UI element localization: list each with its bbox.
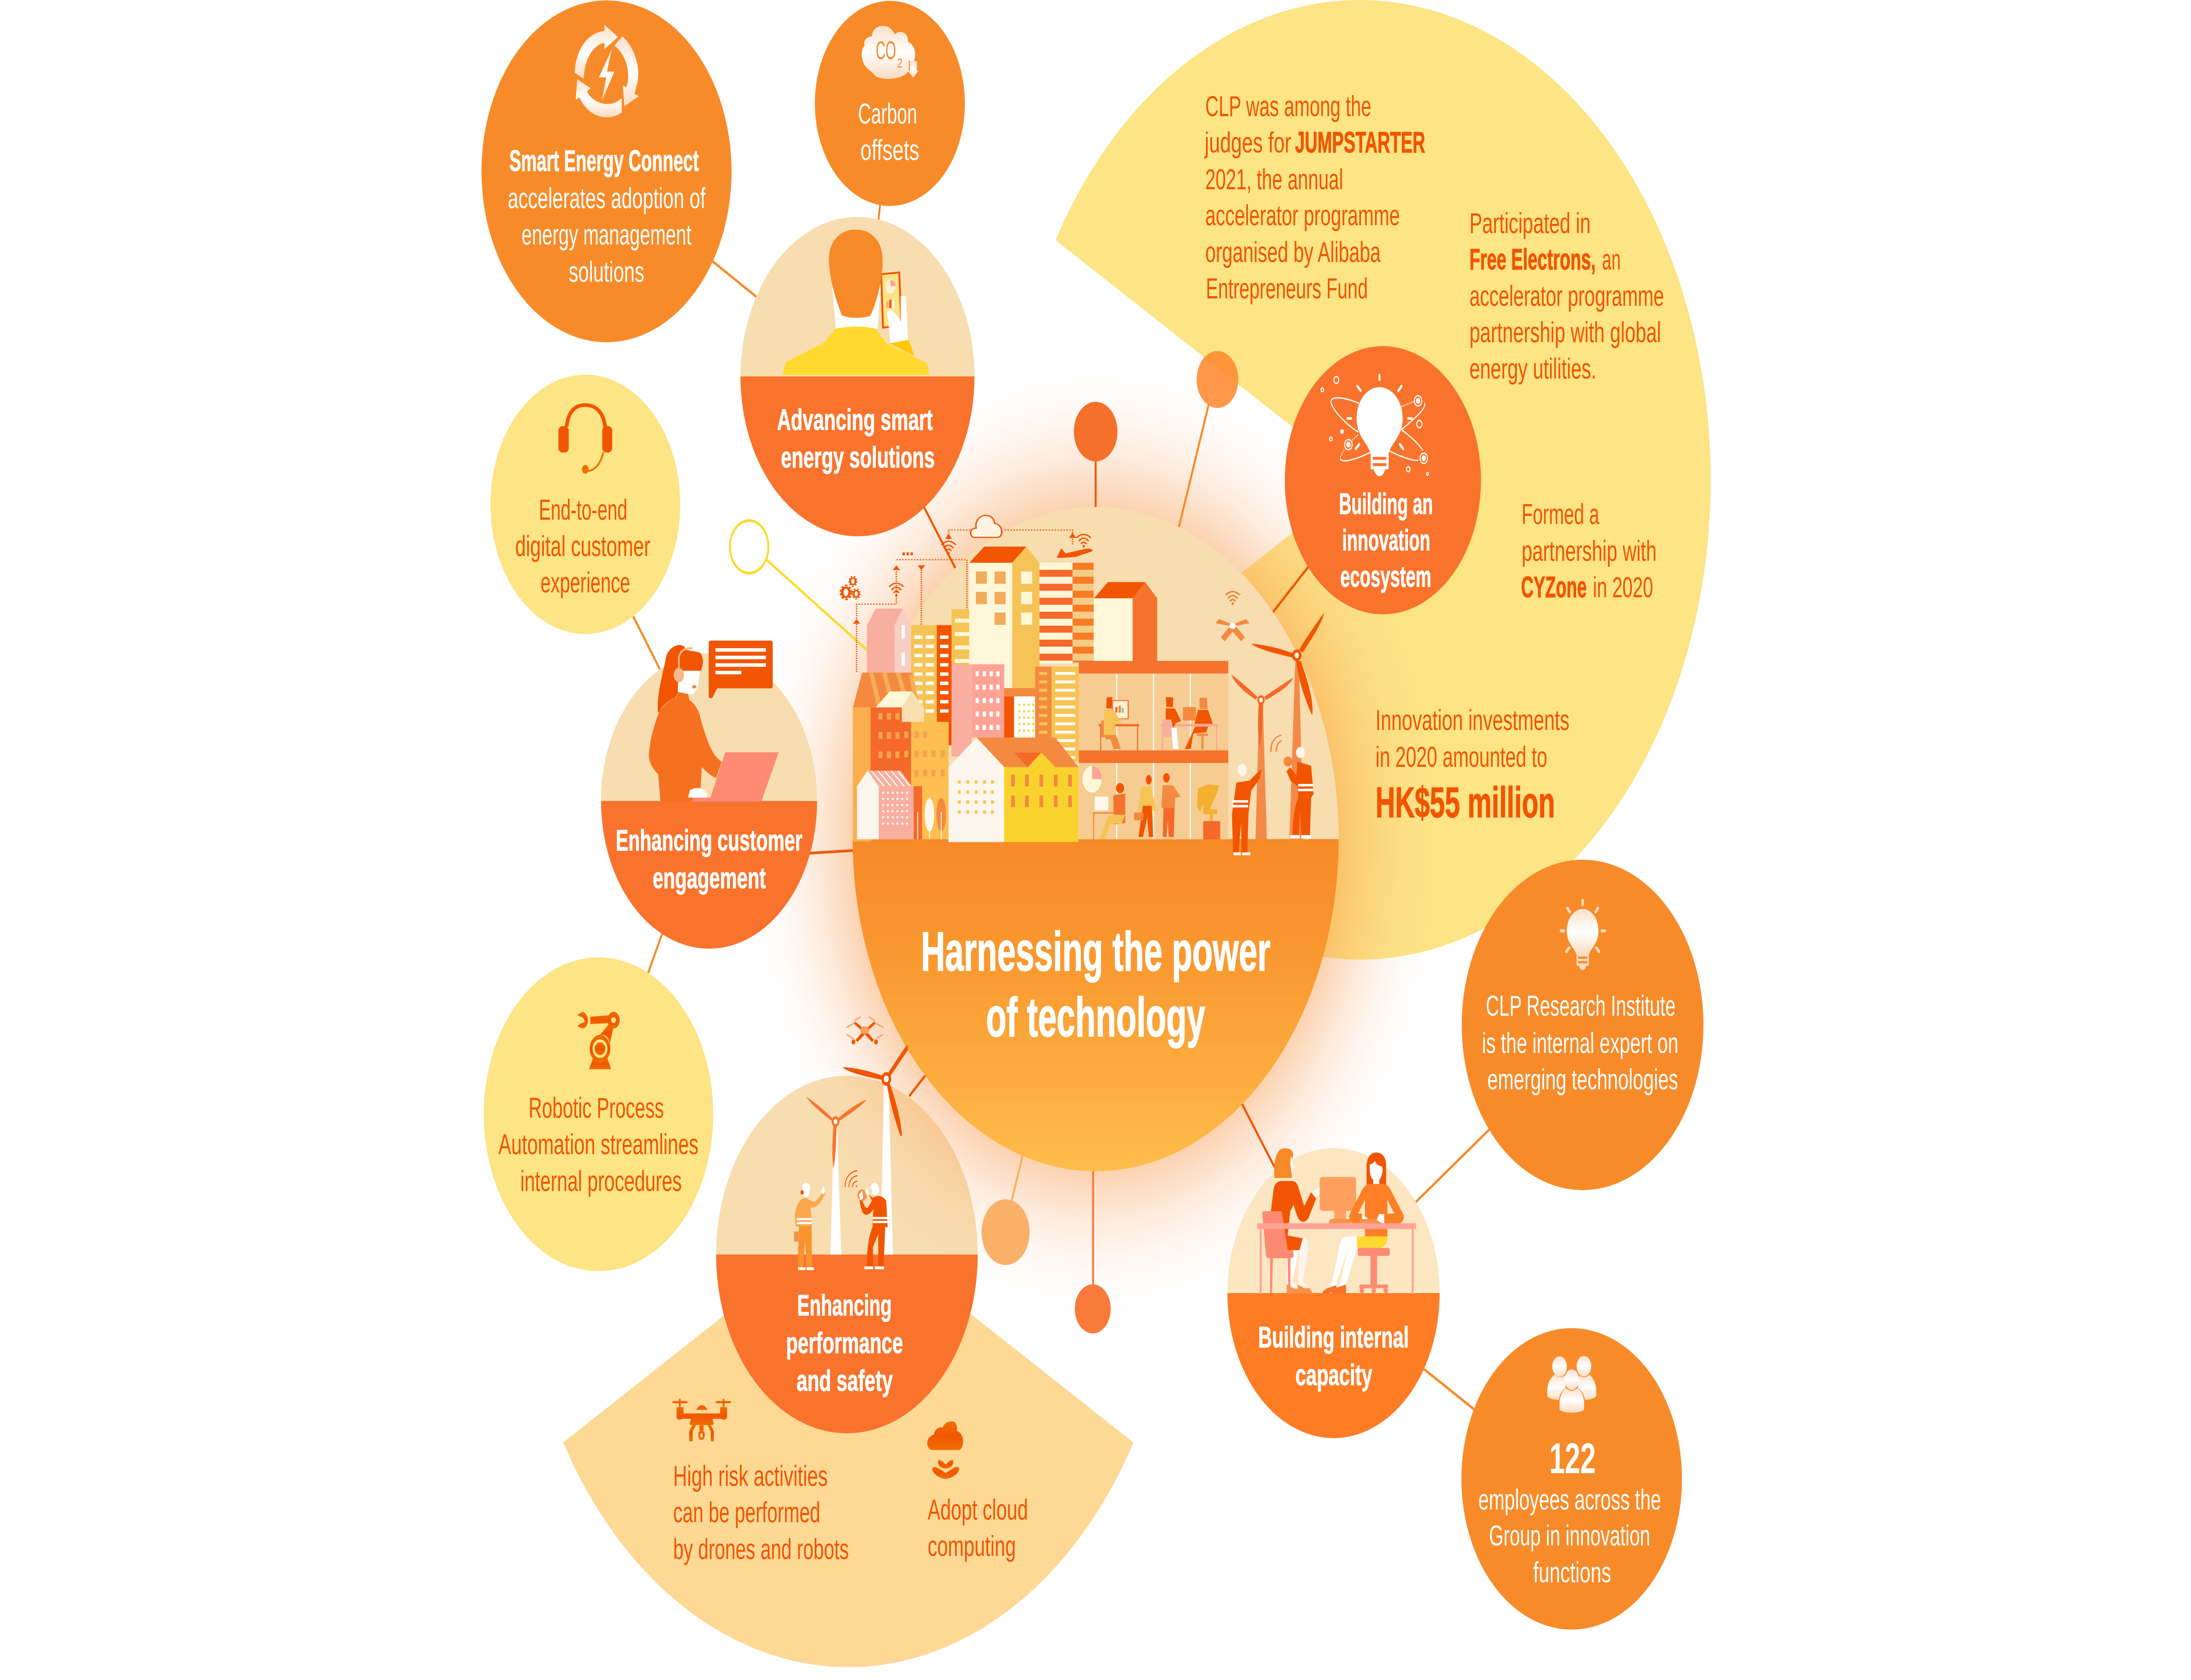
text: carbon offsets: Carbon: [858, 98, 917, 130]
illustration: call centre woman: [649, 641, 779, 801]
text: high risk activities: can be performed: [673, 1497, 820, 1529]
text: CLP Research Institute: emerging technologies: [1487, 1064, 1678, 1096]
illustration: two colleagues at desk: [1257, 1148, 1416, 1294]
icon: inspection drone: [672, 1399, 731, 1442]
text: CLP Research Institute: is the internal expert on: [1482, 1028, 1678, 1060]
title: Harnessing the power: [921, 921, 1270, 982]
dot: lower pale orange: [982, 1199, 1030, 1265]
text: innovation investments: in 2020 amounted to: [1376, 741, 1547, 773]
text: smart energy connect: Smart Energy Connect: [509, 144, 699, 177]
central glow: [749, 366, 1442, 1312]
title: of technology: [986, 987, 1205, 1048]
network: [857, 530, 1073, 672]
icon: headset: [558, 405, 612, 474]
text: building an innovation ecosystem: innovation: [1342, 523, 1430, 557]
icon: light bulb with orbits: [1321, 375, 1429, 476]
icon: robot arm: [577, 1012, 620, 1069]
right engineer: [867, 1226, 885, 1266]
text: CYZone partnership: CYZone: [1521, 570, 1587, 604]
panel: performance illustration background: [716, 1076, 978, 1255]
text: building internal capacity: Building internal: [1258, 1320, 1409, 1354]
icon: people: [1547, 1356, 1596, 1413]
panel: robotic process automation: [484, 957, 713, 1271]
text: innovation investments: Innovation investments: [1376, 705, 1570, 737]
text: end-to-end: digital customer: [515, 531, 650, 563]
text: building internal capacity: capacity: [1295, 1358, 1372, 1392]
text: JUMPSTARTER judges: judges for: [1204, 127, 1291, 159]
text: 122 employees: [1478, 1435, 1661, 1589]
icon: CO2 cloud: [862, 26, 918, 79]
text: CYZone partnership: [1521, 499, 1657, 604]
pink tower: [951, 664, 972, 757]
left block: [853, 707, 871, 841]
text: smart energy connect: energy management: [521, 219, 691, 251]
text: robotic process automation: Automation streamlines: [499, 1129, 698, 1161]
text: end-to-end: [515, 494, 650, 599]
left engineer: [798, 1226, 812, 1268]
text: CYZone partnership: in 2020: [1593, 572, 1653, 604]
text: JUMPSTARTER judges: CLP was among the: [1205, 91, 1371, 123]
office floors: [1079, 673, 1228, 839]
panel: building an innovation ecosystem: [1285, 346, 1481, 614]
connector lines: [633, 204, 1489, 1409]
text: enhancing customer engagement: [616, 823, 802, 895]
text: robotic process automation: internal procedures: [520, 1166, 682, 1198]
text: building an innovation ecosystem: [1339, 487, 1433, 593]
text: advancing smart energy solutions: Advancing smart: [777, 403, 933, 436]
text: enhancing performance and safety: and safety: [797, 1364, 893, 1397]
text: Free Electrons: [1469, 208, 1664, 385]
icon: smart energy arrows: [574, 25, 638, 117]
text: CLP Research Institute: [1482, 990, 1678, 1096]
back buildings: [867, 609, 911, 673]
text: smart energy connect: accelerates adoption of: [508, 183, 706, 215]
panel: end-to-end digital customer experience: [490, 375, 680, 634]
text: JUMPSTARTER judges: 2021, the annual: [1205, 164, 1343, 196]
text: 122 employees: functions: [1533, 1557, 1611, 1589]
text: Free Electrons: Free Electrons,: [1469, 242, 1596, 276]
panel: central hub: [841, 507, 1339, 1171]
text: robotic process automation: Robotic Process: [528, 1092, 664, 1124]
text: advancing smart energy solutions: energy solutions: [781, 440, 935, 474]
text: building an innovation ecosystem: Building an: [1339, 487, 1433, 521]
panel: building internal capacity: [1227, 1148, 1439, 1438]
panel: Smart Energy Connect: [482, 0, 731, 342]
illustration: engineers and turbines with drone: [794, 1017, 908, 1270]
icon: light bulb: [1561, 900, 1605, 970]
text: JUMPSTARTER judges: accelerator programme: [1205, 200, 1400, 232]
engineers: [1232, 769, 1262, 852]
dot: yellow ring: [730, 521, 768, 573]
icon: cloud computing: [927, 1421, 963, 1479]
panel: carbon offsets: [815, 1, 965, 206]
panel: CLP Research Institute: [1462, 860, 1703, 1190]
text: Free Electrons: accelerator programme: [1469, 280, 1664, 312]
text: high risk activities: High risk activities: [673, 1460, 828, 1492]
illustration: smart city: [841, 515, 1324, 855]
text: 122 employees: 122: [1549, 1435, 1596, 1483]
house on building: [1094, 598, 1133, 661]
text: enhancing customer engagement: engagement: [652, 861, 766, 895]
text: carbon offsets: offsets: [860, 135, 919, 167]
text: adopt cloud computing: Adopt cloud: [928, 1494, 1028, 1526]
icon: CO2 cloud: CO: [876, 36, 896, 65]
panel: innovation ecosystem yellow sector: [1056, 0, 1711, 960]
text: Free Electrons: an: [1602, 244, 1621, 276]
text: end-to-end: experience: [540, 567, 630, 599]
dot: upper right: [1197, 351, 1238, 408]
text: CLP Research Institute: CLP Research Institute: [1486, 990, 1676, 1022]
text: enhancing performance and safety: Enhancing: [797, 1288, 892, 1322]
panel: enhancing customer engagement: [601, 641, 817, 949]
tall building: [969, 546, 1026, 563]
text: JUMPSTARTER judges: JUMPSTARTER: [1295, 125, 1425, 159]
text: high risk activities: by drones and robots: [673, 1534, 849, 1566]
text: JUMPSTARTER judges: organised by Alibaba: [1205, 237, 1381, 269]
dot: lower: [1075, 1284, 1111, 1333]
text: CYZone partnership: Formed a: [1522, 499, 1599, 531]
office people upper: [1112, 701, 1128, 719]
dot: top: [1074, 402, 1117, 461]
text: 122 employees: employees across the: [1478, 1484, 1661, 1516]
wind turbines: [1289, 661, 1303, 839]
text: building an innovation ecosystem: ecosystem: [1340, 560, 1431, 593]
text: JUMPSTARTER judges: [1204, 91, 1425, 305]
text: enhancing customer engagement: Enhancing customer: [616, 823, 802, 857]
title: [921, 921, 1270, 1048]
text: Free Electrons: partnership with global: [1469, 317, 1661, 349]
text: enhancing performance and safety: performance: [786, 1326, 903, 1360]
text: 122 employees: Group in innovation: [1489, 1520, 1650, 1552]
text: building internal capacity: [1258, 1320, 1409, 1392]
panel: enhancing performance and safety: [716, 1017, 978, 1433]
text: Free Electrons: energy utilities.: [1469, 353, 1596, 385]
icon: CO2 cloud: 2: [897, 56, 903, 71]
text: JUMPSTARTER judges: Entrepreneurs Fund: [1206, 273, 1368, 305]
text: high risk activities: [673, 1460, 849, 1566]
text: adopt cloud computing: computing: [928, 1531, 1016, 1563]
text: CYZone partnership: partnership with: [1522, 535, 1657, 567]
text: innovation investments: HK$55 million: [1376, 779, 1555, 827]
text: end-to-end: End-to-end: [539, 494, 628, 526]
panel: advancing smart energy solutions: [741, 217, 975, 536]
text: carbon offsets: [858, 98, 919, 167]
panel: 122 employees: [1461, 1328, 1682, 1630]
panel: performance and safety peach sector: [563, 1217, 1134, 1667]
text: adopt cloud computing: [928, 1494, 1028, 1563]
centre houses: [977, 737, 1078, 767]
illustration: man with smartphone: [783, 230, 929, 375]
text: smart energy connect: [508, 144, 706, 288]
drone over hub: [1216, 619, 1250, 642]
text: advancing smart energy solutions: [777, 403, 935, 474]
text: enhancing performance and safety: [786, 1288, 903, 1397]
small houses: [914, 786, 922, 839]
text: Free Electrons: Participated in: [1469, 208, 1591, 240]
text: smart energy connect: solutions: [569, 256, 644, 288]
text: innovation investments: [1376, 705, 1570, 827]
office people lower: [1082, 766, 1102, 793]
text: robotic process automation: [499, 1092, 698, 1198]
